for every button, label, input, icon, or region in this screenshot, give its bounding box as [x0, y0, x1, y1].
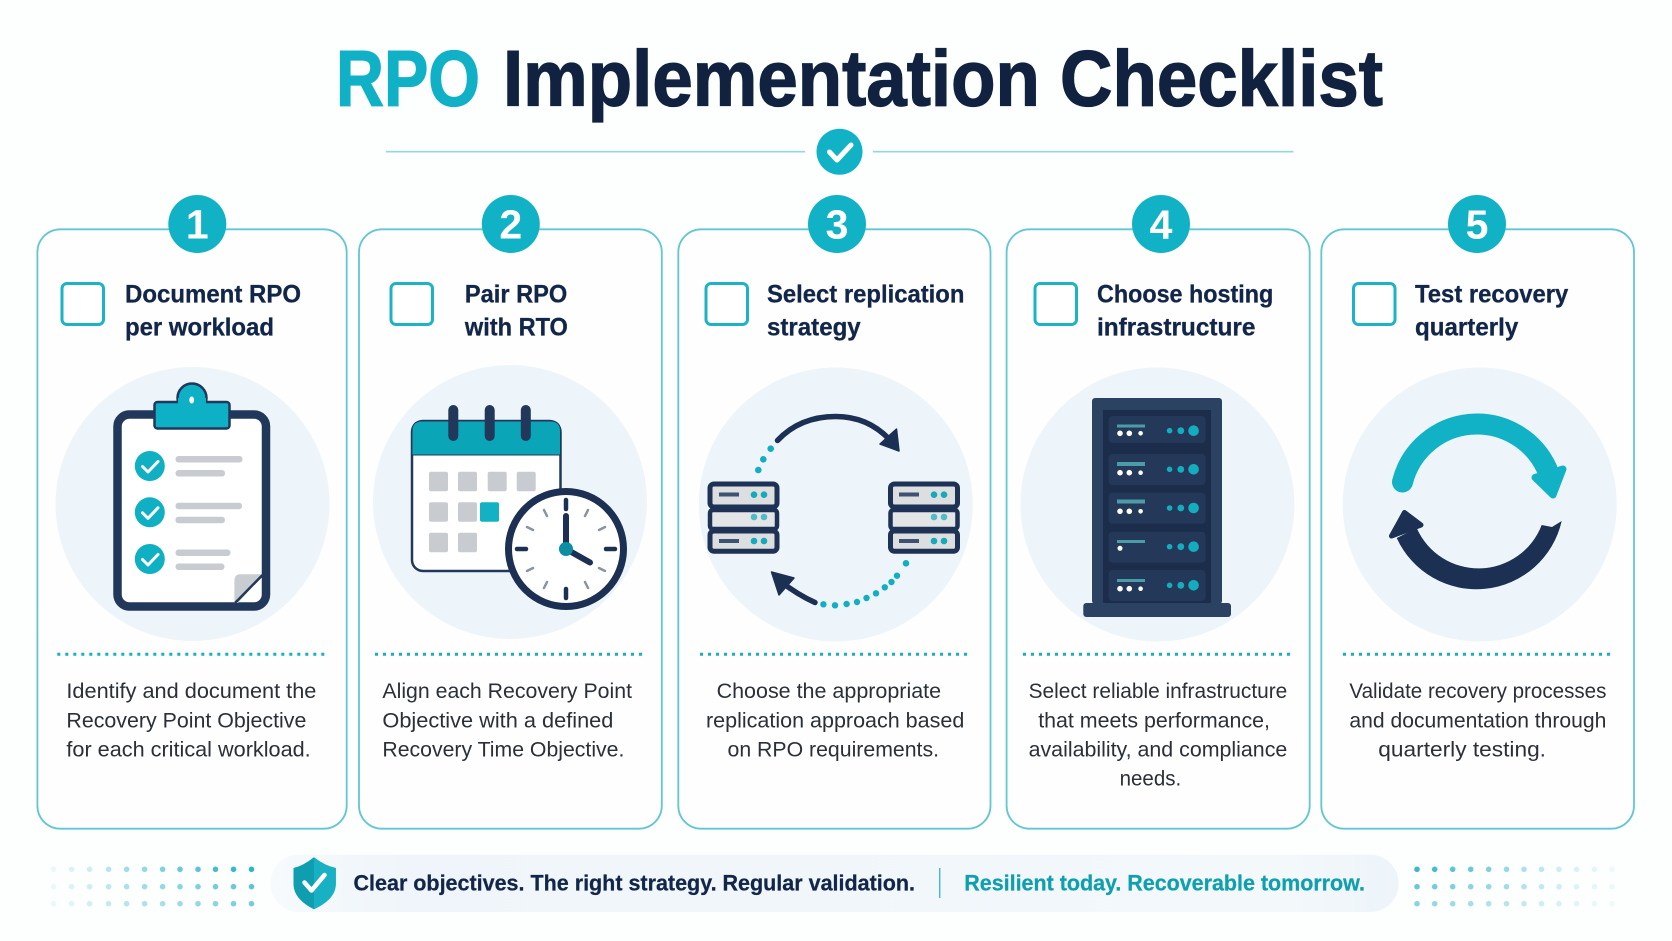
description 4: availability, and compliance — [1029, 737, 1287, 761]
description 1: Identify and document the — [66, 679, 316, 703]
description 2: Recovery Time Objective. — [382, 737, 624, 761]
footer banner — [270, 855, 1399, 912]
icon: clipboard — [56, 367, 330, 641]
panel: step 2 pair RPO with RTO — [359, 195, 662, 829]
title: Implementation Checklist — [503, 34, 1383, 122]
heading 3: Select replication — [767, 282, 964, 309]
icon: calendar and clock — [373, 365, 647, 639]
description 5 — [1349, 679, 1606, 761]
heading 4: infrastructure — [1097, 315, 1255, 342]
heading 5: quarterly — [1415, 315, 1519, 342]
icon: shield with check — [294, 857, 336, 909]
description 3: Choose the appropriate — [717, 679, 941, 703]
description 4: Select reliable infrastructure — [1029, 679, 1287, 703]
panel: step 5 test recovery quarterly — [1321, 195, 1634, 829]
description 1: for each critical workload. — [66, 737, 311, 761]
step number badge 1: 1 — [186, 202, 209, 248]
heading 2 — [464, 282, 568, 342]
heading 4: Choose hosting — [1097, 282, 1273, 309]
footer message: Clear objectives. The right strategy. Regular validation. — [354, 871, 915, 896]
icon: left server — [710, 484, 777, 551]
title: RPO — [336, 34, 480, 122]
heading 2: with RTO — [464, 315, 568, 342]
icon: recovery cycle arrows — [1343, 368, 1617, 642]
footer dot pattern right — [1414, 866, 1615, 906]
checkbox 5 — [1354, 284, 1395, 324]
heading 4 — [1097, 282, 1273, 342]
footer dot pattern left — [51, 866, 254, 906]
panel: step 1 document RPO — [37, 195, 347, 829]
heading 1: Document RPO — [125, 282, 301, 309]
checkbox 2 — [391, 284, 432, 324]
description 5: Validate recovery processes — [1349, 679, 1606, 703]
checkbox 1 — [62, 284, 104, 324]
panel: step 4 choose hosting infrastructure — [1007, 195, 1310, 829]
heading 5 — [1415, 282, 1569, 342]
checkbox 4 — [1035, 284, 1076, 324]
heading 1 — [125, 282, 301, 342]
icon: right server — [890, 484, 958, 551]
description 5: and documentation through — [1349, 708, 1606, 732]
description 4: needs. — [1120, 766, 1181, 790]
description 1: Recovery Point Objective — [66, 708, 306, 732]
heading 3: strategy — [767, 315, 861, 342]
step number badge 4 — [1132, 195, 1190, 253]
heading 1: per workload — [125, 315, 274, 342]
step number badge 3: 3 — [826, 202, 848, 248]
step number badge 3 — [808, 195, 866, 253]
step number badge 4: 4 — [1150, 202, 1173, 248]
description 3: replication approach based — [706, 708, 964, 732]
heading 5: Test recovery — [1415, 282, 1569, 309]
description 2: Align each Recovery Point — [382, 679, 632, 703]
panel: step 3 select replication strategy — [678, 195, 990, 829]
arrow: teal cycle arc — [1402, 424, 1563, 495]
description 2 — [382, 679, 632, 761]
icon: replication between servers — [699, 368, 973, 642]
arrow: top replication arc — [778, 416, 899, 451]
arrow: bottom replication arc — [772, 572, 815, 602]
description 5: quarterly testing. — [1378, 737, 1546, 761]
title divider with check badge — [386, 129, 1294, 175]
arrow: navy cycle arc — [1392, 512, 1562, 589]
step number badge 2: 2 — [499, 202, 522, 248]
checkbox 3 — [706, 284, 748, 324]
description 3: on RPO requirements. — [728, 737, 939, 761]
description 2: Objective with a defined — [382, 708, 613, 732]
description 4: that meets performance, — [1038, 708, 1270, 732]
description 1 — [66, 679, 316, 761]
footer tagline: Resilient today. Recoverable tomorrow. — [964, 871, 1365, 896]
step number badge 1 — [168, 195, 226, 253]
step number badge 2 — [482, 195, 540, 253]
heading 2: Pair RPO — [465, 282, 567, 309]
step number badge 5: 5 — [1466, 202, 1488, 248]
icon: server rack — [1020, 368, 1294, 642]
heading 3 — [767, 282, 964, 342]
step number badge 5 — [1448, 195, 1506, 253]
description 3 — [706, 679, 964, 761]
description 4 — [1029, 679, 1287, 790]
